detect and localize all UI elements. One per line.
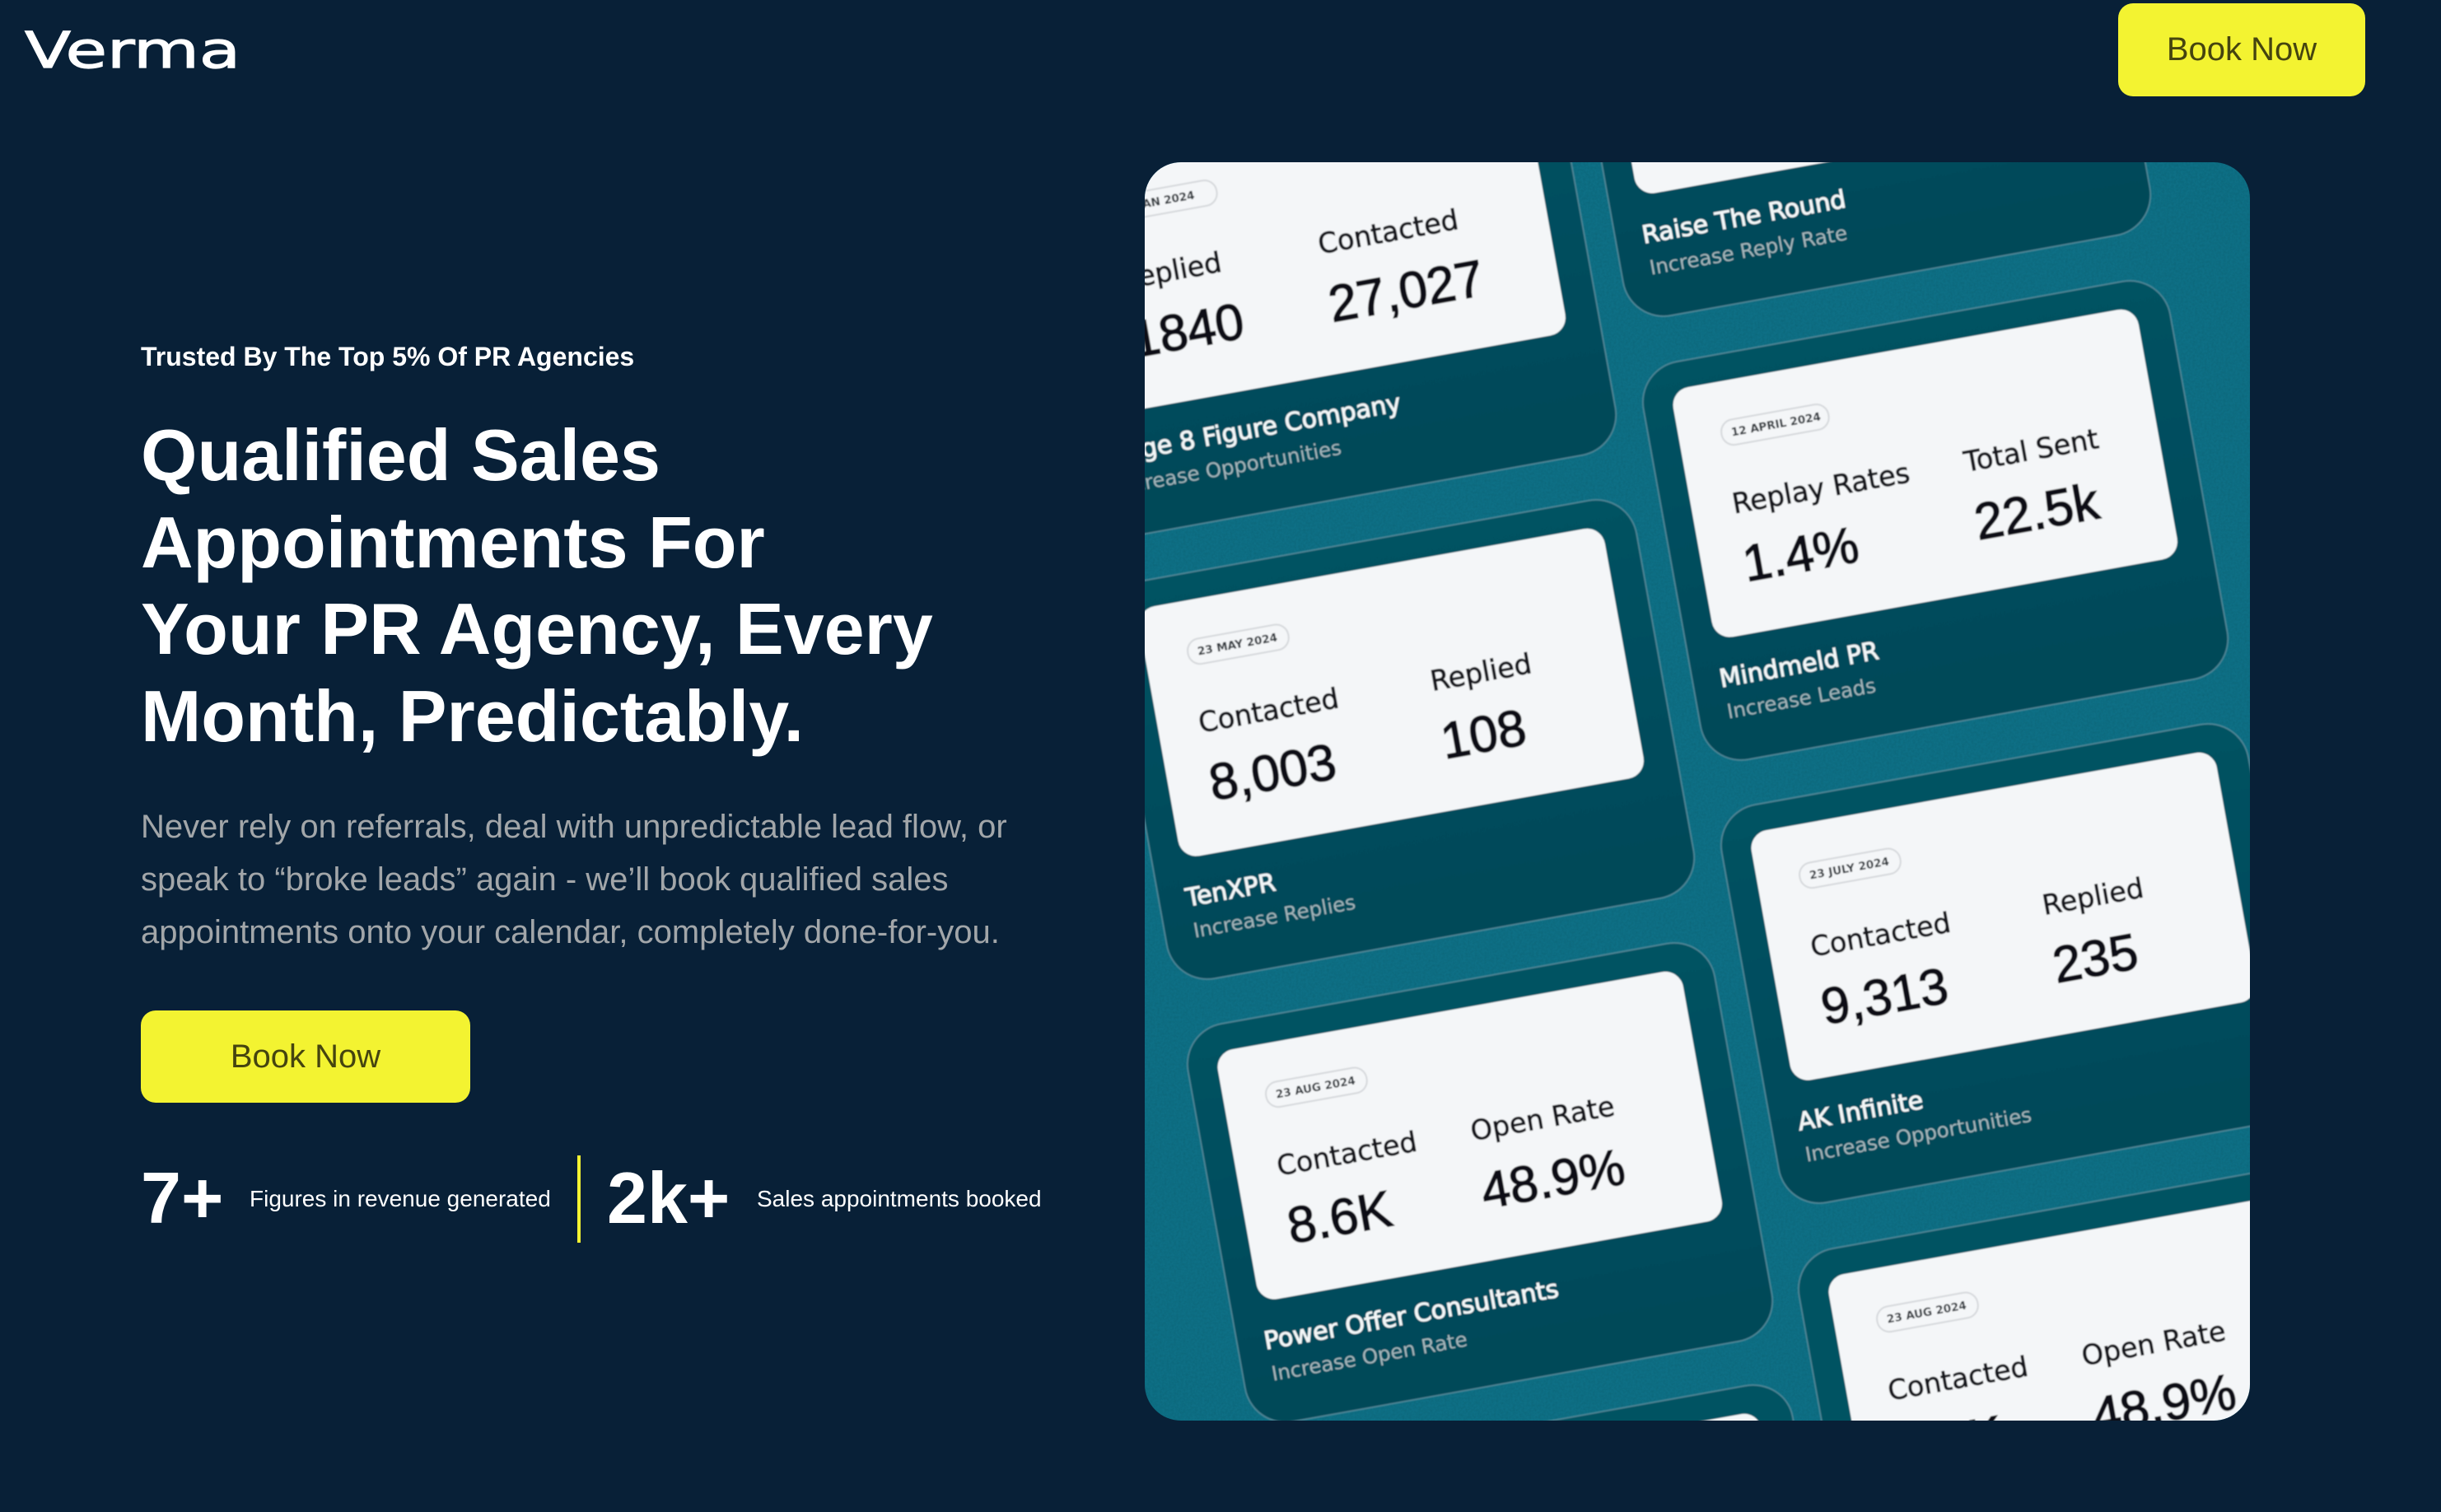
card: Power Offer Consultants: Increase Open Rate [1270, 1327, 1469, 1386]
card: TenXPR: Increase Replies [1192, 890, 1357, 943]
stat divider [577, 1155, 581, 1243]
card: Mindmeld PR: Replay Rates [1729, 456, 1912, 520]
card: bottom right metrics: Open Rate [2079, 1314, 2229, 1372]
eyebrow text: Trusted By The Top 5% Of PR Agencies [141, 342, 634, 371]
panel: results cards collage [1145, 162, 2250, 1421]
card: TenXPR: TenXPR [1183, 869, 1278, 913]
card: Mindmeld PR: Total Sent [1961, 422, 2101, 478]
card: Mindmeld PR: 12 APRIL 2024 [1730, 410, 1822, 440]
card: bottom right metrics: Contacted [1885, 1351, 2031, 1407]
card: TenXPR: 23 MAY 2024 [1197, 631, 1278, 659]
card: AK Infinite: Contacted [1808, 907, 1953, 963]
card: TenXPR: 8,003 [1205, 734, 1341, 812]
card: AK Infinite: 23 JULY 2024 [1809, 855, 1890, 883]
card: 8 Figure Company: 27,027 [1324, 250, 1488, 334]
description paragraph: speak to “broke leads” again - we’ll book qualified sales [141, 861, 949, 898]
card: Raise The Round: Increase Reply Rate [1648, 221, 1849, 280]
card: Mindmeld PR [1636, 274, 2234, 767]
card: Power Offer Consultants [1181, 936, 1779, 1429]
card: TenXPR [1103, 493, 1701, 986]
stat label: Figures in revenue generated [250, 1186, 551, 1211]
card: 8 Figure Company: Contacted [1315, 203, 1461, 260]
main book now button: Book Now [231, 1038, 380, 1074]
card: TenXPR: Contacted [1196, 683, 1342, 739]
card: Mindmeld PR: Mindmeld PR [1717, 637, 1881, 694]
card: AK Infinite: Increase Opportunities [1804, 1103, 2033, 1167]
card: 8 Figure Company [1145, 162, 1617, 535]
card: Power Offer Consultants: Power Offer Consultants [1262, 1275, 1561, 1356]
headline: Qualified Sales [141, 414, 660, 496]
description paragraph [141, 809, 1007, 950]
card: AK Infinite [1720, 722, 2250, 1205]
card: Raise The Round: Raise The Round [1640, 185, 1848, 250]
card: Mindmeld PR: 1.4% [1739, 516, 1863, 593]
card: AK Infinite: AK Infinite [1795, 1086, 1925, 1137]
stat label: Sales appointments booked [757, 1186, 1042, 1211]
headline: Month, Predictably. [141, 675, 804, 757]
main book now button [141, 1010, 470, 1103]
card: TenXPR: 108 [1436, 699, 1530, 770]
card: Power Offer Consultants: Contacted [1274, 1126, 1420, 1182]
headline [141, 414, 933, 757]
logo: Verma [25, 21, 240, 80]
card: bottom right metrics [1797, 1172, 2250, 1421]
card: Raise The Round [1600, 162, 2152, 318]
description paragraph: appointments onto your calendar, completely done-for-you. [141, 914, 1000, 950]
headline: Appointments For [141, 502, 765, 583]
card: Mindmeld PR: Increase Leads [1725, 674, 1878, 724]
top book now button [2118, 3, 2365, 96]
description paragraph: Never rely on referrals, deal with unpredictable lead flow, or [141, 809, 1007, 845]
card: TenXPR: Replied [1428, 647, 1534, 698]
stat value: 2k+ [607, 1157, 730, 1239]
headline: Your PR Agency, Every [141, 588, 933, 670]
card: Mindmeld PR: 22.5k [1970, 473, 2104, 551]
card: AK Infinite: 235 [2048, 923, 2142, 994]
card: AK Infinite: 9,313 [1817, 958, 1953, 1036]
card: Power Offer Consultants: 8.6K [1283, 1181, 1397, 1255]
card: Power Offer Consultants: 48.9% [1477, 1139, 1629, 1220]
stat value: 7+ [141, 1157, 223, 1239]
card: Power Offer Consultants: Open Rate [1468, 1090, 1617, 1147]
stat: appointments [607, 1157, 1042, 1239]
card: bottom left partial [1545, 1384, 1795, 1421]
stat: revenue [141, 1157, 551, 1239]
card: Power Offer Consultants: 23 AUG 2024 [1275, 1074, 1356, 1102]
top book now button: Book Now [2167, 31, 2317, 68]
card: AK Infinite: Replied [2040, 871, 2146, 922]
card: bottom right metrics: 23 AUG 2024 [1886, 1299, 1967, 1327]
